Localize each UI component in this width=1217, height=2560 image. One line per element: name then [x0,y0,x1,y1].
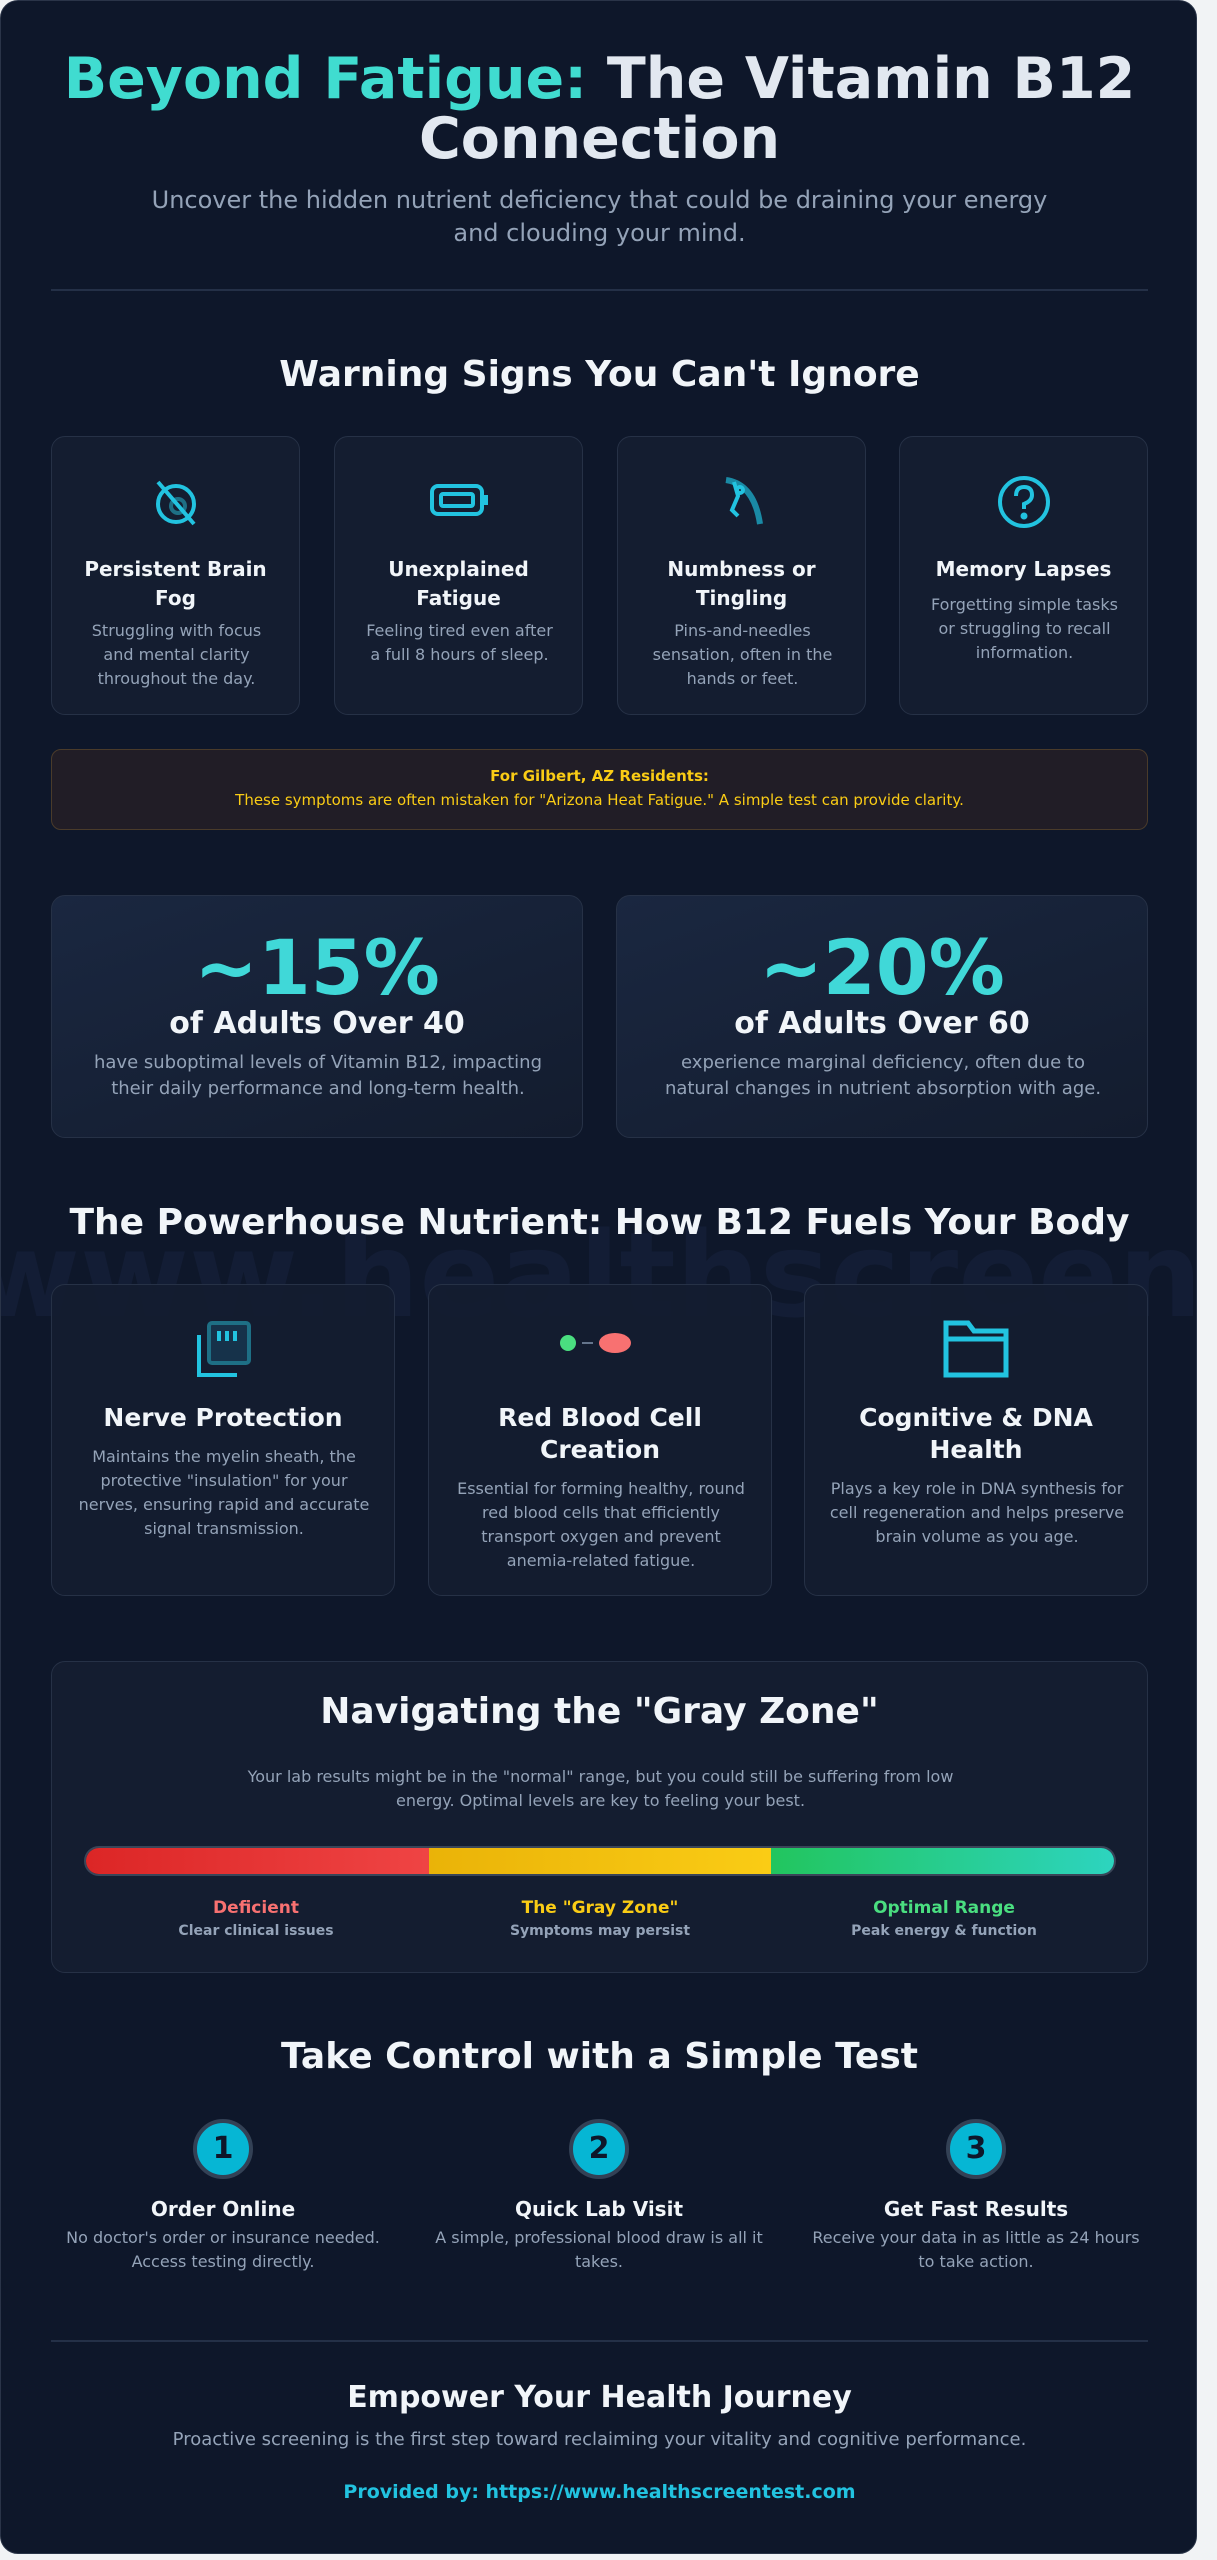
card: red blood cell [428,1284,772,1596]
footer text: Proactive screening is the first step toward reclaiming your vitality and cognitive performance. [173,2429,1026,2450]
card: memory [899,436,1148,715]
card: brain fog [51,436,300,715]
card: nerve protection [51,1284,395,1596]
card: numbness [617,436,866,715]
card: fatigue: Feeling tired even after a full 8 hours of sleep. [366,621,553,664]
stat: 20%: experience marginal deficiency, often due to natural changes in nutrient absorption with age. [665,1052,1101,1099]
footer heading: Empower Your Health Journey [347,2380,852,2415]
title: Beyond Fatigue: The Vitamin B12 [64,46,1135,112]
icon: nerve [726,477,763,524]
card: nerve protection: Nerve Protection [103,1403,343,1432]
stat: 15%: of Adults Over 40 [169,1006,465,1041]
text: Persistent Brain Fog [84,557,267,610]
legend: Clear clinical issues [178,1923,334,1939]
card: cognitive: Cognitive & DNA Health [859,1403,1093,1464]
legend: Optimal Range [873,1898,1015,1918]
step 3: 3 [966,2131,986,2166]
card: cognitive [804,1284,1148,1596]
card: red blood cell: Essential for forming healthy, round red blood cells that efficiently transport oxygen and prevent anemia-related fatigue. [457,1479,745,1570]
callout: Gilbert AZ: For Gilbert, AZ Residents: [490,767,709,785]
card: red blood cell: Red Blood Cell Creation [498,1403,702,1464]
heading: powerhouse: The Powerhouse Nutrient: How B12 Fuels Your Body [70,1202,1129,1243]
text: Unexplained Fatigue [388,557,529,610]
step 1: 1 [213,2131,233,2166]
step 2 [435,2119,763,2271]
step 1: No doctor's order or insurance needed. Access testing directly. [66,2228,380,2271]
card: numbness: Pins-and-needles sensation, often in the hands or feet. [653,621,832,688]
callout: Gilbert AZ [51,749,1148,830]
step 3 [812,2119,1140,2271]
step 2: Quick Lab Visit [515,2197,683,2221]
icon: layers [197,1321,251,1377]
step 2: 2 [589,2131,609,2166]
icon: folder [944,1320,1008,1378]
heading: warning signs: Warning Signs You Can't Ignore [279,354,920,395]
icon: brain fog [156,480,196,526]
step 3: Get Fast Results [884,2197,1068,2221]
panel: gray zone: Your lab results might be in the "normal" range, but you could still be suffering from low energy. Optimal levels are key to feeling your best. [248,1767,953,1810]
step 3: Receive your data in as little as 24 hours to take action. [812,2228,1140,2271]
bar chart: range bar [84,1846,1116,1876]
card: fatigue [334,436,583,715]
legend: Peak energy & function [851,1923,1037,1939]
card: cognitive: Plays a key role in DNA synthesis for cell regeneration and helps preserve brain volume as you age. [830,1479,1124,1546]
stat: 20% [616,895,1148,1138]
icon: cells [560,1333,631,1353]
panel: gray zone [51,1661,1148,1973]
text: Numbness or Tingling [667,557,816,610]
stat: 15%: ~15% [194,923,440,1012]
panel: gray zone: Navigating the "Gray Zone" [320,1691,879,1732]
source: Provided by: https://www.healthscreentest.com [343,2481,856,2503]
title [64,46,1135,172]
panel: warning cards [51,436,1148,715]
text: Memory Lapses [936,557,1111,581]
step 2: A simple, professional blood draw is all it takes. [435,2228,763,2271]
stat: 15%: have suboptimal levels of Vitamin B12, impacting their daily performance and long-term health. [94,1052,542,1099]
icon: battery [430,484,488,516]
legend [178,1898,1037,1939]
stat: 15% [51,895,583,1138]
step 1: Order Online [151,2197,295,2221]
stat: 20%: of Adults Over 60 [734,1006,1030,1041]
heading: take control: Take Control with a Simple Test [281,2036,918,2077]
stat: 20%: ~20% [759,923,1005,1012]
title: Connection [419,106,780,172]
legend: Symptoms may persist [510,1923,690,1939]
callout: Gilbert AZ: These symptoms are often mistaken for "Arizona Heat Fatigue." A simple test can provide clarity. [235,791,964,809]
icon: question [998,476,1050,528]
legend: The "Gray Zone" [522,1898,678,1918]
subtitle: Uncover the hidden nutrient deficiency that could be draining your energy and clouding your mind. [152,186,1047,247]
steps [66,2119,1140,2271]
card: brain fog: Struggling with focus and mental clarity throughout the day. [92,621,261,688]
card: nerve protection: Maintains the myelin sheath, the protective "insulation" for your nerves, ensuring rapid and accurate signal transmission. [79,1447,369,1538]
card: memory: Forgetting simple tasks or struggling to recall information. [931,595,1118,662]
legend: Deficient [213,1898,299,1918]
step 1 [66,2119,380,2271]
